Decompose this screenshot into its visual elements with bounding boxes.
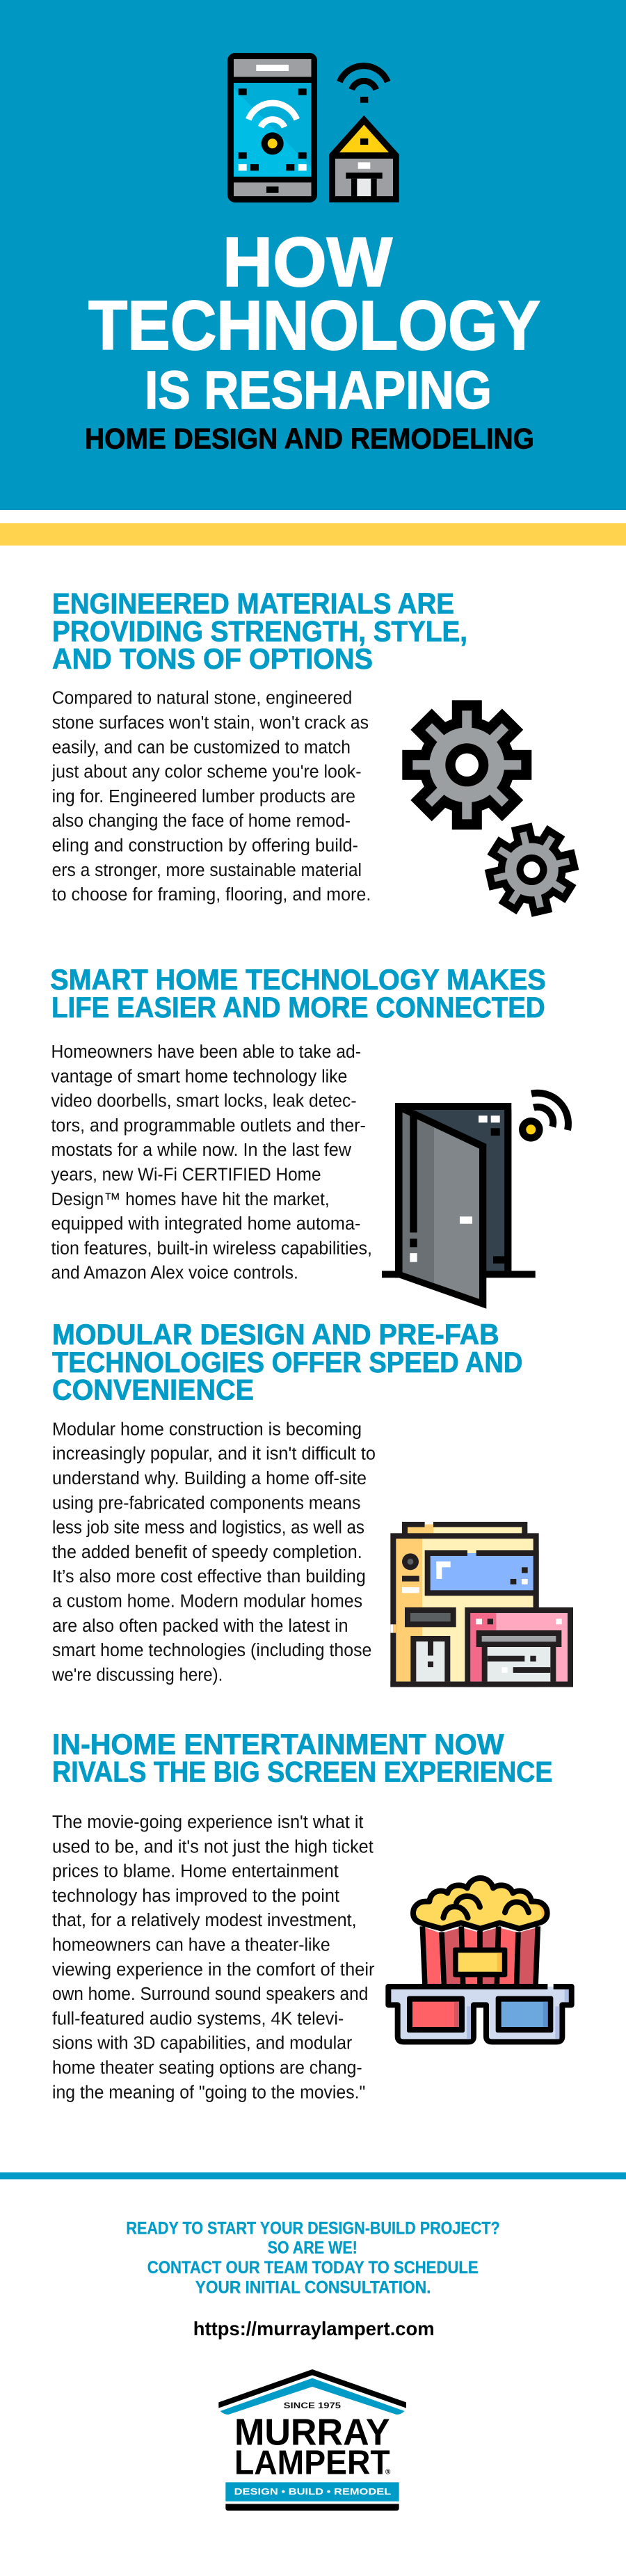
- text block: modular design: [51, 1420, 376, 1685]
- text block: in-home entertainment: prices to blame. Home entertainment: [52, 1862, 339, 1882]
- text block: engineered materials: ing for. Engineered lumber products are: [52, 787, 355, 806]
- text block: modular design: using pre-fabricated components means: [52, 1493, 360, 1513]
- title: TECHNOLOGY: [88, 287, 540, 365]
- text block: modular design: smart home technologies (including those: [52, 1641, 371, 1660]
- text block: smart home technology: tion features, built-in wireless capabilities,: [51, 1239, 372, 1258]
- text block: modular design: increasingly popular, and it isn't difficult to: [52, 1445, 376, 1464]
- call to action: YOUR INITIAL CONSULTATION.: [195, 2277, 431, 2297]
- text block: smart home technology: mostats for a while now. In the last few: [51, 1140, 352, 1160]
- call to action: READY TO START YOUR DESIGN-BUILD PROJECT?: [126, 2219, 500, 2239]
- call to action: [126, 2219, 500, 2297]
- text block: modular design: a custom home. Modern modular homes: [52, 1592, 362, 1612]
- text block: smart home technology: video doorbells, smart locks, leak detec-: [51, 1092, 357, 1111]
- text block: modular design: the added benefit of speedy completion.: [52, 1543, 362, 1562]
- call to action: SO ARE WE!: [268, 2239, 358, 2258]
- heading: engineered materials: [52, 587, 467, 675]
- heading: modular design: [52, 1318, 522, 1406]
- heading: modular design: TECHNOLOGIES OFFER SPEED AND: [52, 1346, 522, 1378]
- text block: in-home entertainment: technology has improved to the point: [52, 1886, 339, 1906]
- text block: engineered materials: to choose for framing, flooring, and more.: [52, 885, 371, 905]
- text block: smart home technology: equipped with integrated home automa-: [51, 1214, 360, 1234]
- heading: modular design: MODULAR DESIGN AND PRE-FAB: [52, 1318, 499, 1351]
- icon: small gear: [476, 815, 587, 925]
- text block: engineered materials: easily, and can be customized to match: [52, 738, 351, 757]
- text block: modular design: we're discussing here).: [51, 1665, 223, 1685]
- heading: smart home technology: LIFE EASIER AND MORE CONNECTED: [51, 991, 545, 1024]
- text block: smart home technology: [51, 1042, 372, 1283]
- text block: in-home entertainment: [52, 1813, 375, 2102]
- text block: in-home entertainment: viewing experience in the comfort of their: [52, 1960, 375, 1980]
- logo: Murray Lampert: MURRAY: [234, 2412, 390, 2453]
- yellow band: [0, 523, 626, 546]
- text block: smart home technology: and Amazon Alex voice controls.: [51, 1264, 298, 1283]
- panel: in-home entertainment: [52, 1728, 572, 2102]
- call to action: CONTACT OUR TEAM TODAY TO SCHEDULE: [147, 2258, 479, 2277]
- text block: engineered materials: also changing the face of home remod-: [52, 811, 351, 831]
- text block: smart home technology: Homeowners have been able to take ad-: [51, 1042, 361, 1062]
- icon: large gear: [402, 700, 531, 829]
- text block: in-home entertainment: ing the meaning of "going to the movies.": [52, 2083, 365, 2102]
- text block: in-home entertainment: used to be, and it's not just the high ticket: [52, 1837, 374, 1857]
- heading: engineered materials: ENGINEERED MATERIALS ARE: [52, 587, 454, 620]
- heading: engineered materials: AND TONS OF OPTIONS: [52, 642, 373, 675]
- logo: Murray Lampert: [218, 2369, 406, 2511]
- icon: popcorn and 3D glasses: [388, 1878, 572, 2042]
- text block: in-home entertainment: that, for a relatively modest investment,: [52, 1911, 357, 1930]
- heading: engineered materials: PROVIDING STRENGTH, STYLE,: [52, 614, 467, 647]
- panel: header: [0, 0, 626, 510]
- text block: in-home entertainment: own home. Surround sound speakers and: [52, 1985, 368, 2004]
- text block: smart home technology: Design™ homes have hit the market,: [51, 1190, 330, 1209]
- text block: engineered materials: just about any color scheme you're look-: [51, 763, 362, 782]
- text block: modular design: Modular home construction is becoming: [52, 1420, 362, 1439]
- text block: engineered materials: [51, 689, 371, 905]
- icon: smartphone with wifi: [227, 53, 317, 202]
- text block: engineered materials: ers a stronger, more sustainable material: [52, 861, 362, 880]
- panel: modular design: [51, 1318, 573, 1687]
- text block: in-home entertainment: homeowners can have a theater-like: [52, 1936, 330, 1955]
- text block: in-home entertainment: sions with 3D capabilities, and modular: [52, 2034, 353, 2053]
- logo: Murray Lampert: DESIGN • BUILD • REMODEL: [234, 2486, 391, 2497]
- text block: smart home technology: vantage of smart home technology like: [51, 1067, 347, 1086]
- text block: modular design: are also often packed with the latest in: [52, 1616, 348, 1636]
- text block: engineered materials: eling and construction by offering build-: [52, 836, 358, 856]
- text block: smart home technology: tors, and programmable outlets and ther-: [51, 1116, 366, 1136]
- text block: modular design: less job site mess and logistics, as well as: [52, 1518, 364, 1538]
- logo: Murray Lampert: ®: [385, 2469, 391, 2476]
- heading: in-home entertainment: IN-HOME ENTERTAINMENT NOW: [52, 1728, 504, 1760]
- title: IS RESHAPING: [145, 360, 492, 420]
- icon: smart house with wifi: [329, 66, 399, 202]
- text block: modular design: It’s also more cost effective than building: [52, 1567, 366, 1587]
- logo: Murray Lampert: SINCE 1975: [284, 2401, 342, 2410]
- panel: smart home technology: [50, 963, 568, 1309]
- heading: in-home entertainment: RIVALS THE BIG SCREEN EXPERIENCE: [52, 1756, 552, 1788]
- text block: in-home entertainment: home theater seating options are chang-: [52, 2058, 362, 2078]
- text block: in-home entertainment: full-featured audio systems, 4K televi-: [52, 2009, 344, 2028]
- panel: engineered materials: [51, 587, 587, 925]
- logo: Murray Lampert: LAMPERT: [234, 2444, 390, 2482]
- text block: modular design: understand why. Building a home off-site: [52, 1469, 367, 1488]
- title: HOW: [223, 223, 393, 301]
- text block: engineered materials: Compared to natural stone, engineered: [52, 689, 352, 708]
- title: [85, 223, 540, 455]
- text block: smart home technology: years, new Wi-Fi CERTIFIED Home: [51, 1165, 321, 1184]
- blue divider bar: [0, 2172, 626, 2179]
- heading: in-home entertainment: [52, 1728, 552, 1788]
- heading: modular design: CONVENIENCE: [52, 1374, 254, 1406]
- icon: modular houses: [390, 1522, 573, 1687]
- heading: smart home technology: [50, 963, 546, 1024]
- website url: https://murraylampert.com: [193, 2318, 435, 2339]
- text block: engineered materials: stone surfaces won't stain, won't crack as: [52, 713, 369, 733]
- icon: smart door: [382, 1093, 568, 1309]
- heading: smart home technology: SMART HOME TECHNOLOGY MAKES: [50, 963, 546, 996]
- title: HOME DESIGN AND REMODELING: [85, 422, 534, 455]
- text block: in-home entertainment: The movie-going experience isn't what it: [52, 1813, 363, 1832]
